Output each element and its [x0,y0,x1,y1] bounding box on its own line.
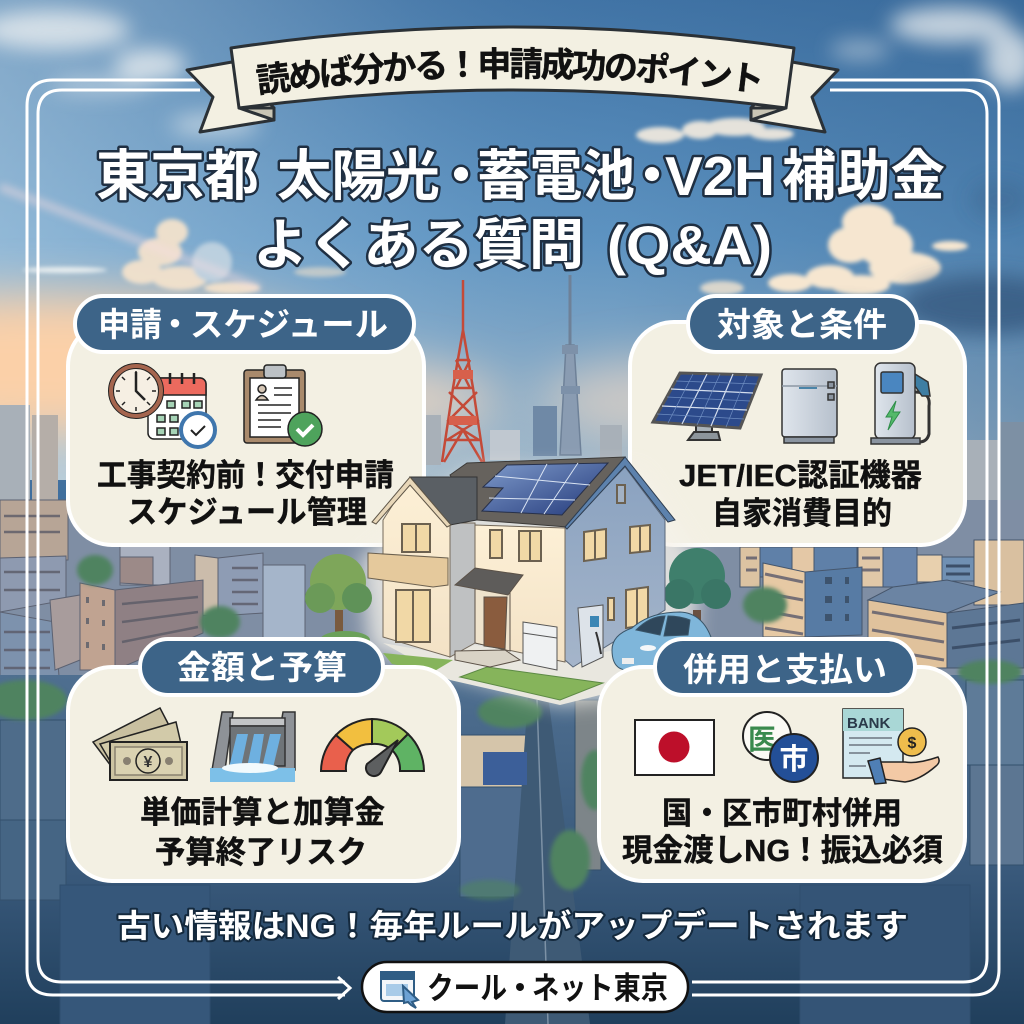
icon: clipboard with check [244,365,322,446]
panel text: スケジュール管理 [127,495,367,530]
icon: local government seals: 市 [779,743,809,776]
button: Cool Net Tokyo link [362,962,688,1012]
panel text [97,458,394,530]
left buildings [0,500,305,690]
left wing wall [383,478,450,657]
icon: arrow into site button [338,977,350,999]
distant skyline [0,405,1024,542]
icon: yen banknotes [93,708,187,780]
soft white clouds [0,7,1024,137]
button shape [362,962,688,1012]
icon: bank transfer: BANK [847,715,890,732]
main roof [450,457,625,527]
panel text: 国・区市町村併用 [662,796,902,831]
icon: local government seals: 医 [748,724,776,755]
right wall [565,467,665,667]
icon: yen banknotes: ¥ [144,754,153,771]
title [96,145,945,276]
rainbow streak [0,187,260,288]
panel heading pill [75,296,414,352]
rooftop solar [483,752,527,785]
icon: EV charger [871,363,930,444]
panel: eligibility [630,296,965,545]
entrance [455,568,523,667]
title: (Q&A) [607,214,772,276]
solar array [482,463,608,515]
panel heading pill [140,639,383,695]
EV charger unit [578,605,603,667]
panel heading pill: ・ [158,306,192,343]
ribbon text: 読めば分かる！申請成功のポイント [256,46,760,96]
icon: clock and calendar [111,366,215,447]
panel heading pill [688,296,917,352]
title: 太陽光 [277,145,440,207]
panel background [630,322,965,545]
illustration: house with solar, battery and EV [305,457,731,705]
title: 東京都 [96,145,259,207]
car [612,612,712,670]
ribbon body [231,27,794,108]
panel heading pill: 併用と支払い [683,651,887,688]
right buildings [740,540,1024,668]
panel text [622,796,943,868]
ground [383,643,700,705]
panel background [68,322,424,545]
title: よくある質問 [253,214,584,276]
ribbon tails [187,62,838,132]
panel text: 自家消費目的 [712,496,892,531]
icon: bank transfer [843,709,939,784]
icon: dam [210,712,295,782]
icon: home battery [782,369,837,443]
panel text: JET/IEC認証機器 [679,458,922,493]
icon: solar panel [653,373,761,440]
button text [427,971,668,1006]
glow behind house [360,470,700,705]
icon: local government seals [743,712,818,782]
icon: Japanese flag [635,720,714,775]
cumulus clouds [23,118,968,295]
panel heading pill: 金額と予算 [177,649,347,686]
button text: ・ [504,971,536,1006]
lower city [0,675,1024,1024]
panel text: 工事契約前！交付申請 [97,458,394,493]
illustration: Tokyo Tower [442,280,484,462]
icon: browser window with cursor [381,972,418,1008]
panel heading pill: 対象と条件 [717,306,887,343]
panel: amount and budget [68,639,459,881]
title: 蓄電池 [477,145,635,207]
button text: クール [427,971,507,1006]
panel text [679,458,922,531]
windows [396,485,650,642]
footer note: 古い情報はNG！毎年ルールがアップデートされます [117,908,908,944]
background: sky [0,0,1024,480]
panel heading pill: スケジュール [190,306,388,343]
title: ・ [624,145,680,207]
dark clouds [780,180,1024,335]
title: V2H [665,145,775,207]
panel text: 単価計算と加算金 [140,795,385,830]
button text: ネット東京 [532,971,668,1006]
panel: application schedule [68,296,424,545]
title: ・ [433,145,489,207]
panel text [140,795,385,870]
greenery [0,555,1022,900]
title: 補助金 [782,145,945,207]
panel background [599,667,965,881]
panel text: 現金渡しNG！振込必須 [622,833,943,868]
icon: budget gauge [321,719,424,776]
panel heading pill: 申請 [98,306,162,343]
illustration: Tokyo Skytree [560,275,581,455]
ribbon banner [186,26,840,134]
road [505,695,590,1024]
trees [305,548,731,649]
sunset glow [0,295,820,440]
icon: bank transfer: $ [908,735,917,752]
front wall [475,525,565,662]
panel text: 予算終了リスク [155,835,367,870]
home battery unit [523,622,557,670]
lawn [383,653,603,700]
left roof [410,477,477,525]
background: city [0,405,1024,1024]
balcony [368,553,448,587]
panel background [68,667,459,881]
panel: combination and payment [599,639,965,881]
panel heading pill [655,639,915,695]
